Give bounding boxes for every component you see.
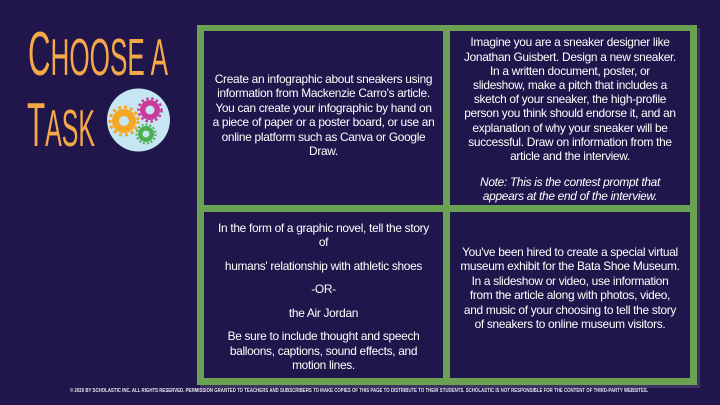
panel: infographic task: online platform such as Canva or Google xyxy=(222,130,425,144)
panel: graphic novel task: the Air Jordan xyxy=(289,306,358,320)
panel: sneaker designer task: Imagine you are a sneaker designer like xyxy=(470,35,670,49)
panel: graphic novel task: humans' relationship with athletic shoes xyxy=(225,258,422,272)
panel: museum exhibit task: You've been hired to create a special virtual xyxy=(462,244,678,258)
title: TASK xyxy=(27,91,95,160)
panel: graphic novel task: -OR- xyxy=(311,282,336,296)
title xyxy=(27,20,168,160)
panel: museum exhibit task xyxy=(450,212,690,378)
panel: sneaker designer task: appears at the end of the interview. xyxy=(483,189,657,203)
panel: sneaker designer task xyxy=(450,31,690,205)
panel: infographic task: You can create your infographic by hand on xyxy=(215,100,432,114)
panel: infographic task: a piece of paper or a poster board, or use an xyxy=(213,115,434,129)
panel: museum exhibit task: from the article along with photos, video, xyxy=(470,288,670,302)
panel: infographic task xyxy=(204,31,443,205)
panel: graphic novel task xyxy=(204,212,443,378)
panel: museum exhibit task: In a slideshow or video, use information xyxy=(472,274,668,288)
panel: infographic task: information from Mackenzie Carro's article. xyxy=(217,86,430,100)
panel: museum exhibit task: and music of your choosing to tell the story xyxy=(464,302,676,316)
panel: graphic novel task: Be sure to include thought and speech xyxy=(228,329,419,343)
panel: graphic novel task: of xyxy=(319,235,328,249)
panel: sneaker designer task: sketch of your sneaker, the high-profile xyxy=(474,92,666,106)
panel: sneaker designer task: explanation of why your sneaker will be xyxy=(472,121,668,135)
panel: sneaker designer task: Note: This is the contest prompt that xyxy=(480,175,660,189)
panel: graphic novel task: balloons, captions, sound effects, and xyxy=(230,344,417,358)
icon: gears xyxy=(107,88,170,152)
panel: museum exhibit task: museum exhibit for the Bata Shoe Museum. xyxy=(460,259,680,273)
panel: sneaker designer task: successful. Draw on information from the xyxy=(468,135,672,149)
panel: graphic novel task: In the form of a graphic novel, tell the story xyxy=(218,220,429,234)
panel: sneaker designer task: article and the interview. xyxy=(510,149,630,163)
panel: infographic task: Create an infographic about sneakers using xyxy=(215,72,432,86)
grid frame xyxy=(197,25,697,385)
panel: graphic novel task: motion lines. xyxy=(292,358,355,372)
panel: sneaker designer task: slideshow, make a pitch that includes a xyxy=(473,78,667,92)
panel: sneaker designer task: In a written document, poster, or xyxy=(490,64,650,78)
panel: infographic task: Draw. xyxy=(309,144,338,158)
panel: sneaker designer task: person you think should endorse it, and an xyxy=(464,106,676,120)
panel: museum exhibit task: of sneakers to online museum visitors. xyxy=(475,317,665,331)
panel: sneaker designer task: Jonathan Guisbert. Design a new sneaker. xyxy=(464,50,676,64)
